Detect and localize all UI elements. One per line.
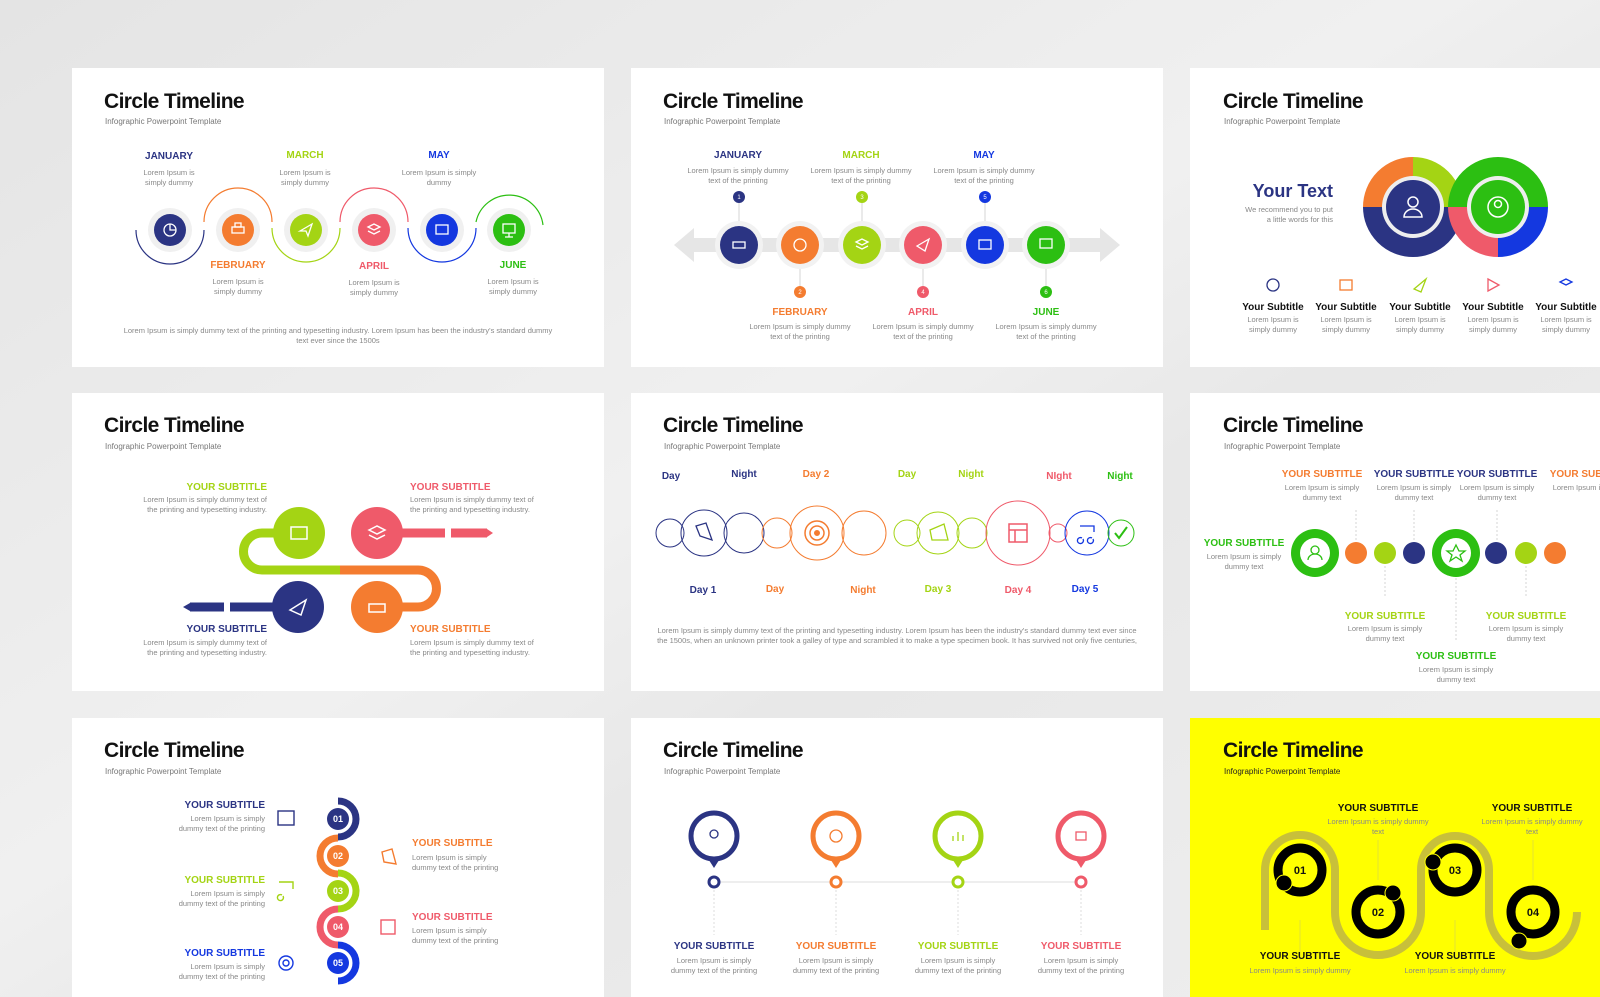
- labels: YOUR SUBTITLE: [1204, 538, 1285, 549]
- card 6: dots row: Circle Timeline: [1223, 414, 1363, 437]
- card 4: snake path: YOUR SUBTITLE: [186, 624, 267, 635]
- subtitles row: simply dummy: [1249, 325, 1297, 334]
- card 3: infinity: [1190, 68, 1600, 367]
- labels: JUNE: [1033, 307, 1060, 318]
- card 4: snake path: the printing and typesetting industry.: [147, 505, 267, 514]
- your text: Your Text: [1253, 181, 1333, 201]
- labels: YOUR SUBTITLE: [1041, 941, 1122, 952]
- track: [1265, 835, 1577, 956]
- nodes: [273, 507, 325, 559]
- labels: dummy text of the printing: [1038, 966, 1124, 975]
- card 2: arrow timeline: [631, 68, 1163, 367]
- labels: dummy text: [1303, 493, 1342, 502]
- card 6: dots row: [1190, 393, 1600, 691]
- labels: text of the printing: [770, 332, 830, 341]
- labels: dummy text: [1478, 493, 1517, 502]
- labels: FEBRUARY: [772, 307, 828, 318]
- labels: Lorem Ipsum is simply dummy: [810, 166, 912, 175]
- month labels: Lorem Ipsum is: [487, 277, 539, 286]
- numbered dots: 4: [921, 290, 925, 296]
- card 4: snake path: Lorem Ipsum is simply dummy text of: [143, 495, 268, 504]
- labels: Lorem Ipsum is simply: [1419, 665, 1494, 674]
- subtitles row: Lorem Ipsum is: [1247, 315, 1299, 324]
- labels: Lorem Ipsum is simply: [921, 956, 996, 965]
- card 7: vertical chain: Infographic Powerpoint Template: [105, 767, 222, 776]
- numbered dots: 3: [860, 195, 864, 201]
- labels: Lorem Ipsum is simply dummy: [1404, 966, 1506, 975]
- month labels: JANUARY: [145, 151, 193, 162]
- card 7: vertical chain: 04: [333, 922, 343, 932]
- labels: [671, 941, 1124, 975]
- labels: YOUR SUBTITLE: [1260, 951, 1341, 962]
- labels: Lorem Ipsum is simply: [677, 956, 752, 965]
- labels: YOUR SUBTITLE: [1374, 469, 1455, 480]
- month labels: simply dummy: [350, 288, 398, 297]
- labels: YOUR SUBTITLE: [1416, 651, 1497, 662]
- card 2: arrow timeline: Circle Timeline: [663, 90, 803, 113]
- labels: text of the printing: [831, 176, 891, 185]
- snake track: [190, 533, 487, 607]
- labels: Lorem Ipsum is simply dummy: [933, 166, 1035, 175]
- month labels: simply dummy: [214, 287, 262, 296]
- numbered dots: 5: [983, 195, 987, 201]
- labels: Lorem Ipsum is simply: [1489, 624, 1564, 633]
- day/night labels: Day 4: [1005, 585, 1032, 596]
- card 3: infinity: a little words for this: [1267, 215, 1333, 224]
- numbered dots: [733, 191, 1052, 298]
- icons: [277, 811, 396, 970]
- card 7: vertical chain: dummy text of the printing: [179, 972, 265, 981]
- card 4: snake path: Infographic Powerpoint Template: [105, 442, 222, 451]
- card 7: vertical chain: dummy text of the printing: [179, 824, 265, 833]
- card 7: vertical chain: Lorem Ipsum is simply: [412, 926, 487, 935]
- month labels: [124, 150, 553, 345]
- labels: dummy text: [1225, 562, 1264, 571]
- rings: [1276, 848, 1555, 949]
- subtitles row: simply dummy: [1322, 325, 1370, 334]
- card 7: vertical chain: [72, 718, 604, 997]
- infinity rings: [1373, 167, 1538, 247]
- labels: Lorem Ipsum is simply: [1348, 624, 1423, 633]
- card 2: arrow timeline: Infographic Powerpoint Template: [664, 117, 781, 126]
- subtitles row: simply dummy: [1469, 325, 1517, 334]
- pins: [691, 813, 1104, 887]
- numbered dots: 2: [798, 290, 802, 296]
- labels: dummy text of the printing: [671, 966, 757, 975]
- labels: YOUR SUBTITLE: [1486, 611, 1567, 622]
- labels: YOUR SUBTITLE: [796, 941, 877, 952]
- card 4: snake path: Lorem Ipsum is simply dummy text of: [143, 638, 268, 647]
- month labels: JUNE: [500, 260, 527, 271]
- labels: YOUR SUBTITLE: [1492, 803, 1573, 814]
- card 4: snake path: YOUR SUBTITLE: [410, 624, 491, 635]
- labels: MARCH: [842, 150, 880, 161]
- paragraph: Lorem Ipsum is simply dummy text of the printing and typesetting industry. Lorem Ipsum has been the industry's standard dummy text ever since: [657, 626, 1137, 635]
- labels: text of the printing: [708, 176, 768, 185]
- card 7: vertical chain: Lorem Ipsum is simply: [412, 853, 487, 862]
- card 7: vertical chain: Lorem Ipsum is simply: [190, 889, 265, 898]
- month labels: Lorem Ipsum is simply: [402, 168, 477, 177]
- subtitles row: Lorem Ipsum is: [1467, 315, 1519, 324]
- card 7: vertical chain: 03: [333, 886, 343, 896]
- labels: YOUR SUBTITLE: [1457, 469, 1538, 480]
- numbered dots: 6: [1044, 290, 1048, 296]
- card 5: day/night circles: Infographic Powerpoint Template: [664, 442, 781, 451]
- labels: Lorem Ipsum is simply dummy: [872, 322, 974, 331]
- labels: Lorem Ipsum is simply dummy: [1481, 817, 1583, 826]
- step circles: [715, 221, 1070, 269]
- day/night labels: Night: [850, 585, 876, 596]
- labels: [687, 150, 1097, 341]
- subtitles row: Your Subtitle: [1242, 302, 1304, 313]
- labels: YOUR SUBTITLE: [1345, 611, 1426, 622]
- day/night labels: Day: [898, 469, 917, 480]
- card 8: pins: Infographic Powerpoint Template: [664, 767, 781, 776]
- month labels: dummy: [427, 178, 452, 187]
- subtitles row: Lorem Ipsum is: [1394, 315, 1446, 324]
- card 7: vertical chain: YOUR SUBTITLE: [412, 838, 493, 849]
- card 7: vertical chain: YOUR SUBTITLE: [184, 875, 265, 886]
- labels: YOUR SUBTITLE: [1338, 803, 1419, 814]
- card 7: vertical chain: 01: [333, 814, 343, 824]
- card 9: yellow serpentine: [1190, 718, 1600, 997]
- rings: 02: [1372, 907, 1384, 919]
- labels: YOUR SUBTITLE: [1282, 469, 1363, 480]
- month labels: Lorem Ipsum is: [143, 168, 195, 177]
- labels: MAY: [973, 150, 995, 161]
- card 7: vertical chain: YOUR SUBTITLE: [412, 912, 493, 923]
- card 4: snake path: Lorem Ipsum is simply dummy text of: [410, 495, 535, 504]
- labels: dummy text: [1437, 675, 1476, 684]
- day/night labels: Day 2: [803, 469, 830, 480]
- connectors: [1356, 510, 1526, 640]
- wave arcs: [136, 188, 543, 264]
- labels: text of the printing: [893, 332, 953, 341]
- labels: text of the printing: [1016, 332, 1076, 341]
- day/night labels: Day 3: [925, 584, 952, 595]
- month labels: MARCH: [286, 150, 324, 161]
- labels: JANUARY: [714, 150, 762, 161]
- card 9: yellow serpentine: Circle Timeline: [1223, 739, 1363, 762]
- rings: 01: [1294, 865, 1306, 877]
- day/night labels: [662, 469, 1133, 596]
- labels: text of the printing: [954, 176, 1014, 185]
- subtitles row: Lorem Ipsum is: [1540, 315, 1592, 324]
- card 4: snake path: [72, 393, 604, 691]
- month labels: FEBRUARY: [210, 260, 266, 271]
- card 3: infinity: Infographic Powerpoint Template: [1224, 117, 1341, 126]
- card 4: snake path: the printing and typesetting industry.: [147, 648, 267, 657]
- subtitle: Infographic Powerpoint Template: [105, 117, 222, 126]
- card 3: infinity: Circle Timeline: [1223, 90, 1363, 113]
- card 7: vertical chain: Lorem Ipsum is simply: [190, 962, 265, 971]
- day/night labels: Day 1: [690, 585, 717, 596]
- labels: Lorem Ipsum is simply dummy: [1327, 817, 1429, 826]
- gray arrow band: [674, 228, 1120, 262]
- rings: 04: [1527, 907, 1540, 919]
- day/night labels: NIght: [1046, 471, 1072, 482]
- labels: Lorem Ipsum is simply dummy: [995, 322, 1097, 331]
- card 1: wave timeline: [72, 68, 604, 367]
- subtitles row: simply dummy: [1542, 325, 1590, 334]
- connectors: [739, 197, 1046, 292]
- month labels: simply dummy: [145, 178, 193, 187]
- labels: dummy text: [1395, 493, 1434, 502]
- labels: YOUR SUBTITLE: [674, 941, 755, 952]
- labels: [1249, 803, 1583, 975]
- labels: text: [1372, 827, 1385, 836]
- labels: Lorem Ipsum is simply: [1044, 956, 1119, 965]
- card 7: vertical chain: dummy text of the printing: [412, 863, 498, 872]
- labels: Lorem Ipsum is simply: [799, 956, 874, 965]
- labels: Lorem Ipsum is simply: [1377, 483, 1452, 492]
- subtitles row: Your Subtitle: [1389, 302, 1451, 313]
- month labels: APRIL: [359, 261, 389, 272]
- labels: text: [1526, 827, 1539, 836]
- card 4: snake path: the printing and typesetting industry.: [410, 648, 530, 657]
- card 4: snake path: Lorem Ipsum is simply dummy text of: [410, 638, 535, 647]
- labels: dummy text of the printing: [915, 966, 1001, 975]
- labels: Lorem Ipsum is simply dummy: [749, 322, 851, 331]
- card 7: vertical chain: 05: [333, 958, 343, 968]
- month labels: Lorem Ipsum is simply dummy text of the printing and typesetting industry. Lorem Ipsum has been the industry's standard dummy: [124, 326, 553, 335]
- month labels: Lorem Ipsum is: [279, 168, 331, 177]
- month labels: simply dummy: [281, 178, 329, 187]
- card 8: pins: Circle Timeline: [663, 739, 803, 762]
- card 7: vertical chain: Circle Timeline: [104, 739, 244, 762]
- card 5: day/night circles: the 1500s, when an unknown printer took a galley of type and scrambled it to make a type specimen book. It has survived not only five centuries,: [657, 636, 1137, 645]
- card 5: day/night circles: Circle Timeline: [663, 414, 803, 437]
- card 7: vertical chain: dummy text of the printing: [179, 899, 265, 908]
- labels: YOUR SUBTITLE: [184, 800, 265, 811]
- month labels: simply dummy: [489, 287, 537, 296]
- labels: Lorem Ipsum is simply: [1460, 483, 1535, 492]
- labels: YOUR SUBTITLE: [1415, 951, 1496, 962]
- nodes: [1291, 529, 1339, 577]
- subtitles row: Lorem Ipsum is: [1320, 315, 1372, 324]
- chain arcs: [320, 801, 356, 981]
- labels: YOUR SUBTITLE: [918, 941, 999, 952]
- subtitles row: Your Subtitle: [1535, 302, 1597, 313]
- labels: YOUR SUBTITLE: [186, 482, 267, 493]
- month labels: text ever since the 1500s: [296, 336, 380, 345]
- card 8: pins: [631, 718, 1163, 997]
- card 4: snake path: YOUR SUBTITLE: [410, 482, 491, 493]
- labels: dummy text: [1366, 634, 1405, 643]
- subtitles row: Your Subtitle: [1315, 302, 1377, 313]
- day/night labels: Night: [731, 469, 757, 480]
- subtitles row: simply dummy: [1396, 325, 1444, 334]
- day/night labels: Day 5: [1072, 584, 1099, 595]
- numbered dots: 1: [737, 195, 741, 201]
- card 7: vertical chain: YOUR SUBTITLE: [184, 948, 265, 959]
- labels: Lorem Ipsum is simply: [1285, 483, 1360, 492]
- subtitles row: [1242, 279, 1597, 334]
- card 7: vertical chain: 02: [333, 851, 343, 861]
- rings: 03: [1449, 865, 1461, 877]
- day/night labels: Day: [662, 471, 681, 482]
- day/night labels: Night: [1107, 471, 1133, 482]
- card 6: dots row: Infographic Powerpoint Template: [1224, 442, 1341, 451]
- labels: Lorem Ipsum is simply dummy: [687, 166, 789, 175]
- card 5: day/night circles: [631, 393, 1163, 691]
- day/night labels: Day: [766, 584, 785, 595]
- card 9: yellow serpentine: Infographic Powerpoint Template: [1224, 767, 1341, 776]
- title: Circle Timeline: [104, 90, 244, 113]
- circle chain: [656, 501, 1134, 565]
- card 7: vertical chain: Lorem Ipsum is simply: [190, 814, 265, 823]
- month labels: Lorem Ipsum is: [212, 277, 264, 286]
- labels: [1204, 469, 1600, 684]
- labels: dummy text: [1507, 634, 1546, 643]
- month labels: MAY: [428, 150, 450, 161]
- labels: Lorem Ipsum is simply dummy: [1249, 966, 1351, 975]
- card 3: infinity: We recommend you to put: [1245, 205, 1334, 214]
- card 4: snake path: Circle Timeline: [104, 414, 244, 437]
- circles: [148, 208, 531, 252]
- card 7: vertical chain: dummy text of the printing: [412, 936, 498, 945]
- month labels: Lorem Ipsum is: [348, 278, 400, 287]
- subtitles row: Your Subtitle: [1462, 302, 1524, 313]
- day/night labels: Night: [958, 469, 984, 480]
- labels: APRIL: [908, 307, 938, 318]
- card 4: snake path: the printing and typesetting industry.: [410, 505, 530, 514]
- labels: dummy text of the printing: [793, 966, 879, 975]
- labels: Lorem Ipsum is simply: [1207, 552, 1282, 561]
